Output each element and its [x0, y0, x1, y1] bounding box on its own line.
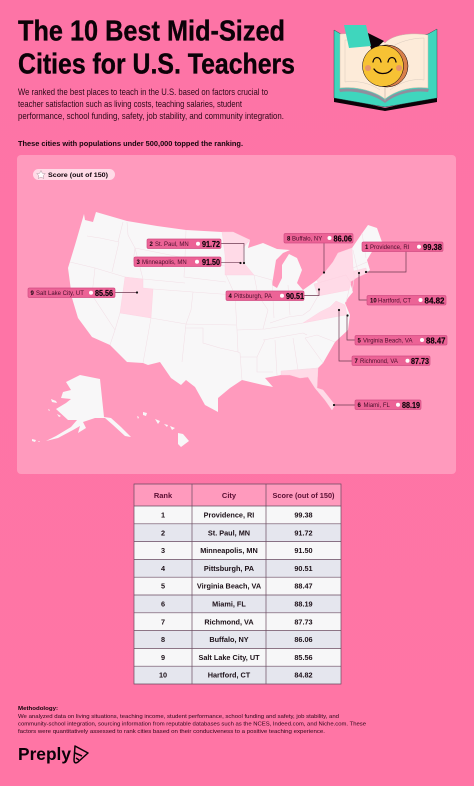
map: United States	[32, 212, 382, 447]
table: rankings: Hartford, CT	[208, 671, 251, 680]
table: rankings: 90.51	[294, 564, 313, 573]
contiguous states	[68, 212, 382, 412]
table: rankings: 85.56	[294, 653, 313, 662]
label 6: Miami	[333, 400, 421, 410]
label 9: Salt Lake City: Salt Lake City, UT	[36, 291, 84, 297]
Alaska islands	[32, 399, 61, 442]
label 7: Richmond: 7	[354, 359, 358, 365]
panel: map background	[17, 155, 456, 474]
label 5: Virginia Beach: 88.47	[426, 336, 446, 345]
title: Cities for U.S. Teachers	[18, 48, 295, 80]
methodology: We analyzed data on living situations, teaching income, student performance, school funding and safety, job stability, and	[18, 714, 339, 720]
label 8: Buffalo: 8	[287, 237, 291, 243]
intro text: teacher satisfaction such as living costs, teaching salaries, student	[18, 99, 242, 109]
label 9: Salt Lake City: 85.56	[95, 289, 113, 298]
methodology: factors were quantitatively assessed to rank cities based on their conduciveness to a positive teaching experience.	[18, 729, 325, 735]
table: rankings: 4	[161, 564, 166, 573]
methodology	[18, 706, 367, 735]
label 2: St. Paul: 91.72	[202, 240, 220, 249]
label 3: Minneapolis: 3	[136, 260, 140, 266]
table: rankings: 10	[159, 671, 167, 680]
table: rankings	[134, 484, 341, 684]
intro text: performance, school funding, safety, job stability, and community integration.	[18, 111, 284, 121]
intro text: We ranked the best places to teach in the U.S. based on factors crucial to	[18, 87, 268, 97]
table header: Score (out of 150)	[272, 491, 335, 500]
Alaska	[46, 375, 131, 441]
title	[18, 16, 295, 80]
label 5: Virginia Beach: Virginia Beach, VA	[363, 339, 412, 345]
logo: Preply: Preply	[18, 744, 71, 764]
label 6: Miami: 88.19	[402, 401, 420, 410]
table: rankings: Pittsburgh, PA	[204, 564, 255, 573]
table: rankings: 84.82	[294, 671, 313, 680]
Hawaii	[137, 412, 189, 447]
methodology: Methodology:	[18, 706, 58, 712]
label 4: Pittsburgh: 4	[228, 294, 232, 300]
label 6: Miami: Miami, FL	[364, 403, 390, 409]
label 3: Minneapolis: 91.50	[202, 258, 220, 267]
table: rankings: 99.38	[294, 510, 313, 520]
label 4: Pittsburgh	[226, 288, 320, 301]
label 4: Pittsburgh: 90.51	[286, 292, 304, 301]
label 4: Pittsburgh: Pittsburgh, PA	[234, 294, 272, 300]
label 8: Buffalo: Buffalo, NY	[292, 237, 322, 243]
table: rankings: Richmond, VA	[204, 617, 254, 626]
table: rankings: Providence, RI	[204, 510, 254, 520]
label 7: Richmond: Richmond, VA	[360, 359, 398, 365]
label 8: Buffalo	[284, 234, 353, 274]
label 9: Salt Lake City	[28, 288, 138, 298]
table: rankings: Buffalo, NY	[209, 635, 249, 644]
label 9: Salt Lake City: 9	[30, 291, 34, 297]
legend: score: Score (out of 150)	[48, 172, 108, 179]
table: rankings: 7	[161, 617, 165, 626]
subheading: These cities with populations under 500,000 topped the ranking.	[18, 139, 243, 148]
label 7: Richmond: 87.73	[411, 357, 429, 366]
highlighted: Virginia	[303, 301, 347, 323]
label 8: Buffalo: 86.06	[334, 234, 352, 243]
table: rankings: 87.73	[294, 617, 313, 626]
table: rankings: 3	[161, 546, 165, 555]
label 5: Virginia Beach	[346, 314, 447, 345]
legend: score	[33, 169, 115, 180]
label 2: St. Paul	[147, 239, 245, 264]
label 3: Minneapolis	[134, 257, 242, 267]
highlighted: New York	[317, 248, 355, 283]
title: The 10 Best Mid-Sized	[18, 16, 285, 48]
table: rankings: Minneapolis, MN	[200, 546, 258, 555]
table: rankings: 5	[161, 582, 165, 591]
table: rankings: Salt Lake City, UT	[198, 653, 260, 662]
label 10: Hartford: 10	[370, 299, 377, 305]
label 1: Providence: Providence, RI	[370, 245, 410, 251]
table: rankings: 1	[161, 510, 165, 520]
label 10: Hartford	[358, 272, 446, 305]
table: rankings: St. Paul, MN	[208, 528, 250, 537]
table: rankings: 91.50	[294, 546, 313, 555]
table: rankings: 6	[161, 600, 165, 608]
label 2: St. Paul: St. Paul, MN	[155, 242, 189, 248]
label 2: St. Paul: 2	[150, 242, 154, 248]
methodology: community-school integration, sourcing information from reputable databases such as the NCES, Indeed.com, and Niche.com. These	[18, 721, 367, 727]
label 5: Virginia Beach: 5	[358, 339, 362, 345]
label 1: Providence: 1	[365, 245, 369, 251]
label 3: Minneapolis: Minneapolis, MN	[142, 260, 187, 266]
table header: City	[222, 491, 237, 500]
icon: open book with smiley	[334, 25, 437, 111]
table: rankings: 8	[161, 635, 165, 644]
intro text	[18, 87, 284, 121]
highlighted: Florida	[281, 368, 335, 410]
table: rankings: 91.72	[294, 528, 313, 537]
table: rankings: 9	[161, 653, 165, 662]
label 7: Richmond	[338, 309, 430, 366]
highlighted: Utah	[120, 277, 153, 318]
highlighted: Pennsylvania	[314, 275, 351, 296]
table: rankings: 88.19	[294, 600, 313, 608]
label 1: Providence	[362, 242, 443, 273]
table: rankings: 2	[161, 528, 165, 537]
table: rankings: Miami, FL	[212, 600, 246, 608]
label 10: Hartford: 84.82	[424, 296, 445, 305]
highlighted: Minnesota	[222, 232, 254, 275]
table header	[134, 484, 341, 506]
table header: Rank	[154, 491, 173, 500]
highlighted: Connecticut and Rhode Island	[354, 268, 367, 279]
table: rankings: 88.47	[294, 582, 313, 591]
state borders	[70, 222, 367, 380]
label 6: Miami: 6	[358, 403, 362, 409]
label 10: Hartford: Hartford, CT	[378, 299, 411, 305]
table: rankings: 86.06	[294, 635, 313, 644]
table: rankings: Virginia Beach, VA	[197, 582, 262, 591]
label 1: Providence: 99.38	[423, 243, 442, 252]
